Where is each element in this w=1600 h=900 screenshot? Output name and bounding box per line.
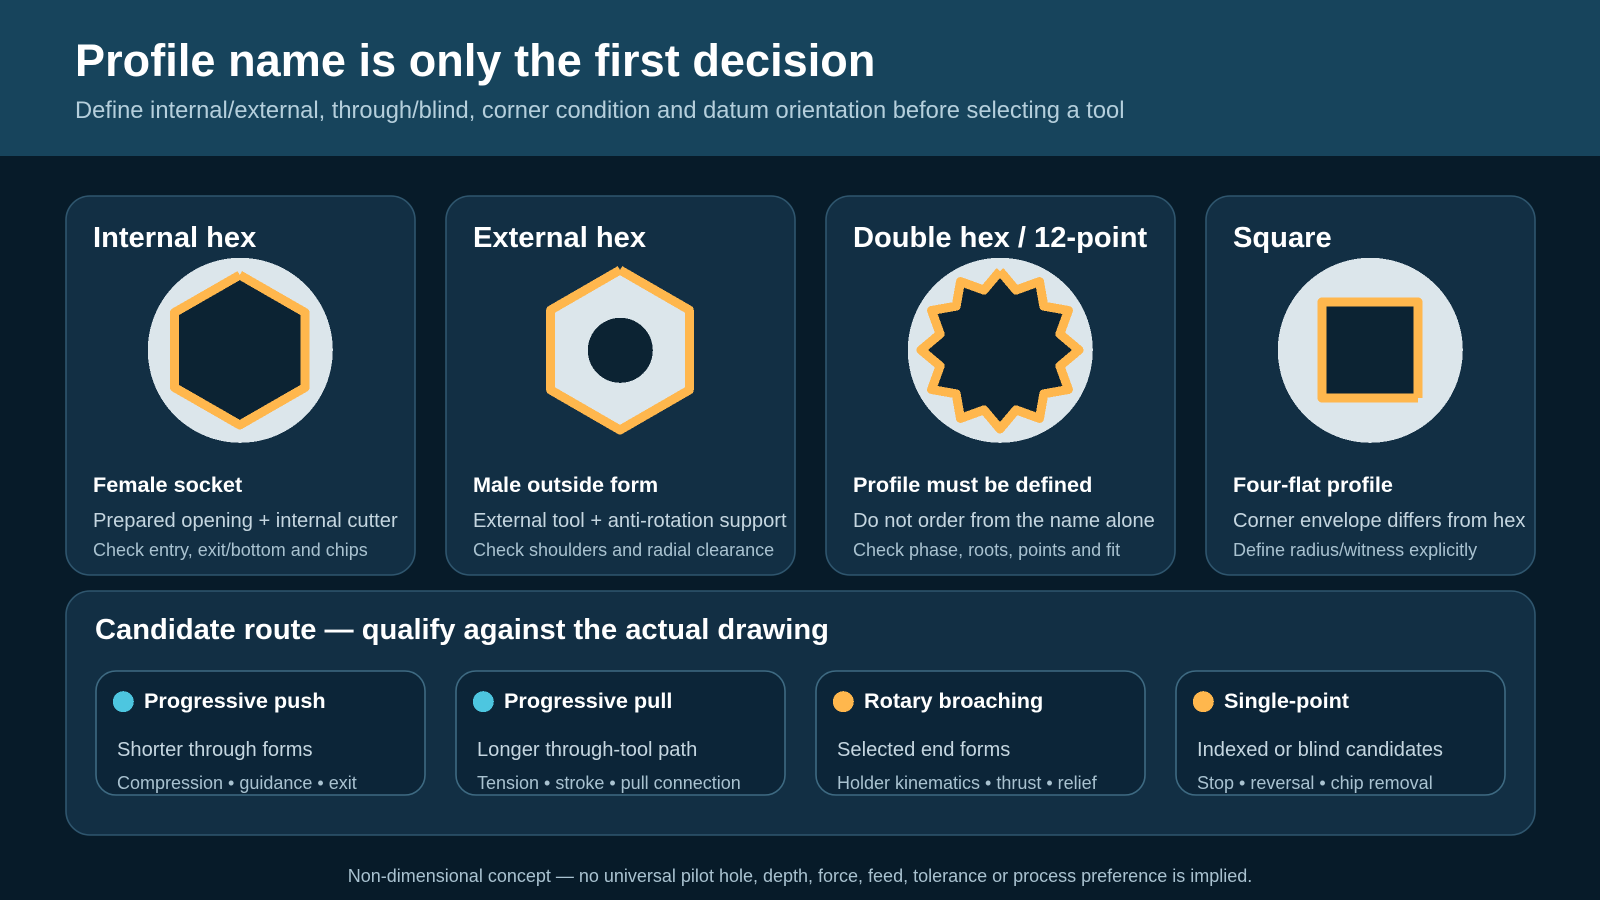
subheading: profile must be defined: Profile must be defined xyxy=(853,472,1092,497)
route card: rotary broaching xyxy=(815,670,1146,796)
subheading: male outside form: Male outside form xyxy=(473,472,658,497)
route use: Indexed or blind candidates xyxy=(1197,739,1443,761)
subheading: female socket: Female socket xyxy=(93,472,242,497)
body: external hex route: External tool + anti-rotation support xyxy=(473,510,787,532)
route concerns: Tension • stroke • pull connection xyxy=(477,773,741,793)
body: internal hex route: Prepared opening + internal cutter xyxy=(93,510,398,532)
route use: Longer through-tool path xyxy=(477,739,697,761)
note: external hex checks: Check shoulders and radial clearance xyxy=(473,540,774,560)
heading: double hex: Double hex / 12-point xyxy=(853,222,1147,254)
panel: candidate route xyxy=(65,590,1536,836)
subheading: four-flat profile: Four-flat profile xyxy=(1233,472,1393,497)
panel: double hex xyxy=(825,195,1176,576)
route card: progressive pull xyxy=(455,670,786,796)
panel: external hex xyxy=(445,195,796,576)
heading: internal hex: Internal hex xyxy=(93,222,256,254)
footer note: Non-dimensional concept — no universal pilot hole, depth, force, feed, tolerance or process preference is implied. xyxy=(348,866,1252,886)
icon: square profile xyxy=(1278,258,1463,443)
panel: internal hex xyxy=(65,195,416,576)
route concerns: Stop • reversal • chip removal xyxy=(1197,773,1433,793)
heading: candidate route: Candidate route — qualify against the actual drawing xyxy=(95,614,829,646)
heading: external hex: External hex xyxy=(473,222,646,254)
route card: single-point xyxy=(1175,670,1506,796)
route card: progressive push xyxy=(95,670,426,796)
route name: Rotary broaching xyxy=(864,688,1043,713)
heading: square: Square xyxy=(1233,222,1332,254)
route concerns: Holder kinematics • thrust • relief xyxy=(837,773,1097,793)
note: square checks: Define radius/witness explicitly xyxy=(1233,540,1477,560)
header band xyxy=(0,0,1600,156)
note: internal hex checks: Check entry, exit/bottom and chips xyxy=(93,540,368,560)
route name: Single-point xyxy=(1224,688,1349,713)
route use: Selected end forms xyxy=(837,739,1010,761)
subtitle: Define internal/external, through/blind, corner condition and datum orientation before selecting a tool xyxy=(75,98,1124,124)
note: double hex checks: Check phase, roots, points and fit xyxy=(853,540,1120,560)
body: double hex route: Do not order from the name alone xyxy=(853,510,1155,532)
icon: 12-point star xyxy=(908,258,1093,443)
route use: Shorter through forms xyxy=(117,739,313,761)
title: Profile name is only the first decision xyxy=(75,35,875,86)
icon: internal hex socket xyxy=(148,258,333,443)
body: square route: Corner envelope differs from hex xyxy=(1233,510,1525,532)
panel: square xyxy=(1205,195,1536,576)
route name: Progressive pull xyxy=(504,688,672,713)
route concerns: Compression • guidance • exit xyxy=(117,773,357,793)
icon: external hex nut xyxy=(551,270,689,430)
route name: Progressive push xyxy=(144,688,326,713)
